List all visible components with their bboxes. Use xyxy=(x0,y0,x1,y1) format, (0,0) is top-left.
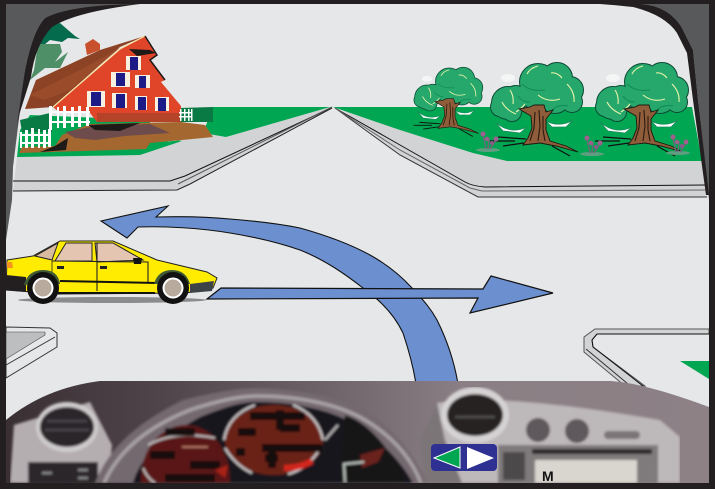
left grass xyxy=(203,107,330,137)
radio xyxy=(498,445,658,483)
right sidewalk xyxy=(335,107,707,197)
lower left island xyxy=(6,327,57,378)
right grass xyxy=(333,107,702,161)
knobs xyxy=(526,418,550,442)
foreground yard xyxy=(17,115,182,157)
dashboard xyxy=(6,381,709,483)
tree 3 xyxy=(595,63,688,156)
green triangle right xyxy=(680,361,709,379)
straight arrow xyxy=(207,276,553,313)
right pillar xyxy=(620,4,709,200)
roof xyxy=(25,36,145,109)
wheels xyxy=(24,270,190,304)
left pillar edge xyxy=(17,4,140,125)
right air vent xyxy=(441,387,509,443)
windows xyxy=(35,243,143,262)
house scene xyxy=(17,23,213,157)
ground shadow xyxy=(40,138,68,152)
right pillar edge xyxy=(600,4,709,195)
left air vent xyxy=(10,402,112,483)
tree 1 xyxy=(414,68,482,136)
lower right island xyxy=(584,329,709,386)
right gauge xyxy=(323,414,386,483)
center stack xyxy=(420,387,680,483)
trees xyxy=(414,63,690,156)
steering wheel and cluster xyxy=(95,388,427,483)
flowers xyxy=(476,132,690,156)
left sidewalk xyxy=(13,107,333,191)
wall xyxy=(53,36,181,122)
direction buttons xyxy=(431,444,497,471)
left gauge xyxy=(141,425,230,483)
center gauge xyxy=(224,405,323,475)
label M: M xyxy=(542,468,554,484)
windows xyxy=(87,56,169,111)
white fences xyxy=(20,106,192,148)
chimney xyxy=(85,39,100,55)
tree behind house xyxy=(30,23,80,80)
car xyxy=(6,241,217,304)
turning arrow xyxy=(101,206,458,384)
tree 2 xyxy=(490,63,583,156)
left pillar xyxy=(6,4,140,240)
